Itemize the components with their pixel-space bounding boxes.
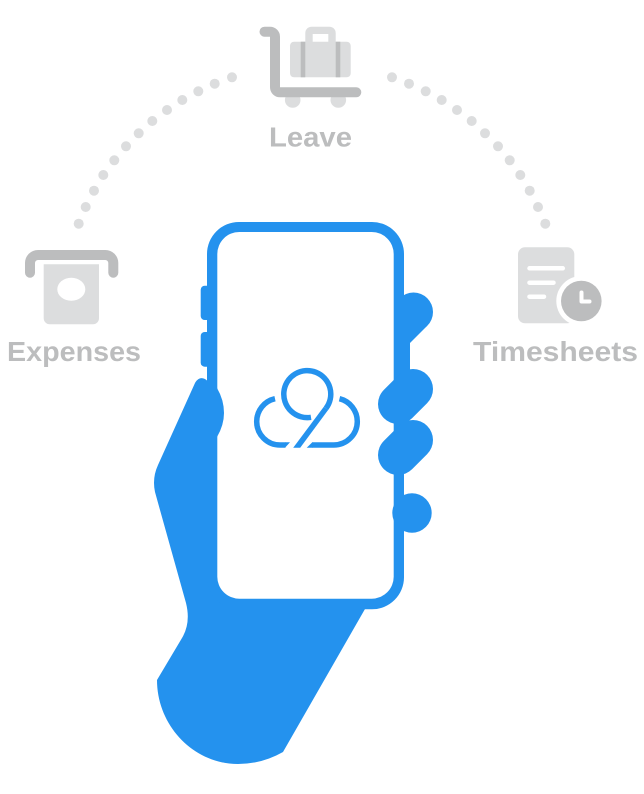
illustration: hand holding phone [154,222,433,764]
label: Timesheets: Timesheets [473,336,638,367]
hand: fingers [392,292,433,533]
logo: cloud with nine [257,371,357,448]
phone: body and screen [207,222,404,609]
icon: timesheet with clock [518,247,606,326]
phone: side buttons [201,286,213,367]
label: Expenses: Expenses [7,336,141,367]
hand: palm and thumb [154,378,372,764]
label: Leave: Leave [269,122,352,153]
icon: card in slot [30,255,113,324]
dotted arc: right [387,72,550,229]
dotted arc: left [74,72,237,229]
icon: luggage trolley [264,27,356,108]
